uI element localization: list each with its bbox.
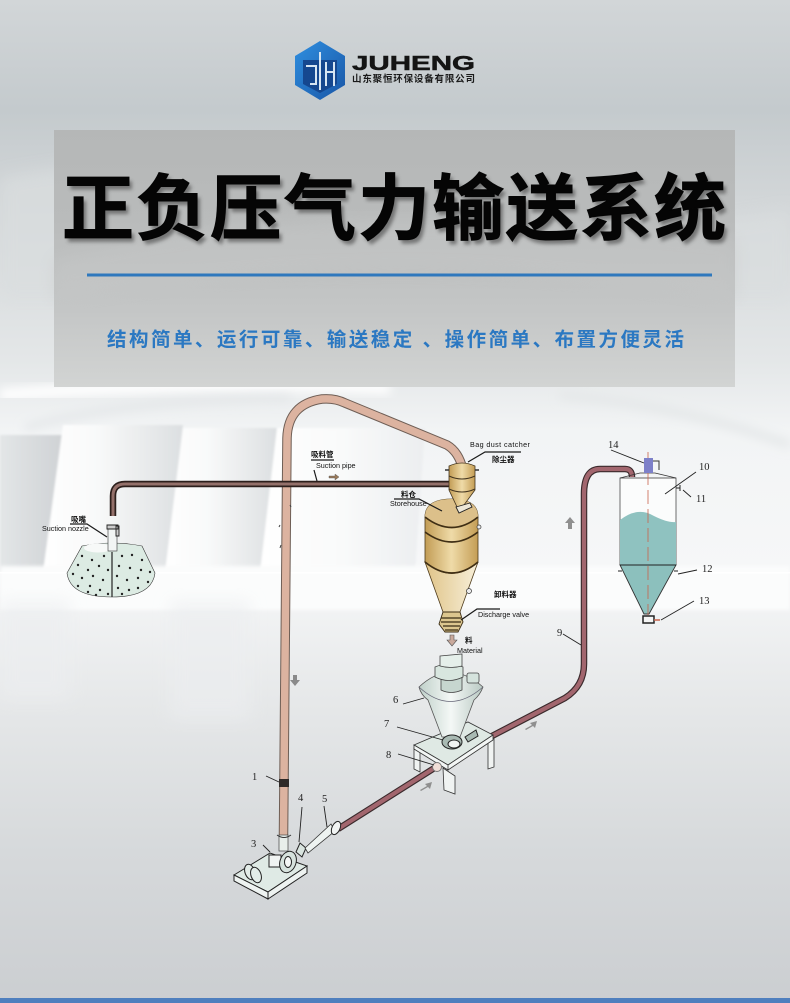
diagram: cyclone feeder with table	[414, 654, 494, 794]
icon: down arrow on pipe	[290, 675, 300, 686]
diagram: bag dust catcher	[445, 440, 531, 513]
title: 正负压气力输送系统	[62, 170, 726, 250]
number labels: 9	[557, 628, 562, 639]
bottom bar	[0, 998, 790, 1003]
number labels: 13	[699, 596, 710, 607]
diagram: storehouse	[390, 489, 481, 612]
table top	[414, 722, 493, 765]
label: discharge valve	[461, 589, 529, 620]
label: suction nozzle	[42, 514, 107, 537]
top inlet	[441, 675, 462, 692]
icon: flow arrows	[420, 517, 575, 791]
pipe sleeve	[432, 762, 442, 772]
number labels: 7	[384, 719, 389, 730]
rotary valve	[442, 735, 462, 749]
label: material with arrow: Material	[457, 646, 483, 655]
diagram: receiving silo	[618, 452, 680, 623]
diagram: long return pipe	[279, 399, 463, 835]
number labels: 4	[298, 793, 304, 804]
number labels: 3	[251, 839, 256, 850]
number labels: 14	[608, 440, 619, 451]
icon: hexagon logo mark	[295, 41, 345, 100]
diagram: suction pipe	[113, 484, 450, 516]
label: suction nozzle: Suction nozzle	[42, 524, 89, 533]
diagram: conveying pipe	[338, 469, 632, 829]
label: suction nozzle: 吸嘴	[71, 514, 86, 524]
label: suction pipe: Suction pipe	[316, 461, 356, 470]
label: bag dust catcher: Bag dust catcher	[470, 440, 531, 449]
cone	[419, 672, 483, 737]
label: discharge valve: Discharge valve	[478, 610, 529, 619]
label: suction pipe	[311, 449, 356, 481]
diagram: blower assembly	[234, 779, 343, 899]
label: storehouse: 料仓	[401, 489, 416, 499]
label: bag dust catcher	[468, 440, 531, 464]
logo	[295, 41, 475, 100]
title shadow: 正负压气力输送系统	[65, 174, 729, 254]
number labels: 1	[252, 772, 257, 783]
label: material with arrow: 料	[465, 635, 473, 645]
number labels: 10	[699, 462, 710, 473]
diagram: material pile with suction nozzle	[42, 514, 155, 597]
logo company name: 山东聚恒环保设备有限公司	[352, 73, 475, 85]
panel: title	[54, 130, 735, 387]
number labels	[251, 440, 712, 852]
label: suction pipe: 吸料管	[311, 449, 334, 459]
subtitle: 结构简单、运行可靠、输送稳定 、操作简单、布置方便灵活	[107, 328, 684, 351]
label: storehouse: Storehouse	[390, 499, 427, 508]
number labels: 5	[322, 794, 327, 805]
label: bag dust catcher: 除尘器	[492, 454, 515, 464]
label: material with arrow	[447, 635, 483, 655]
number labels: 8	[386, 750, 391, 761]
label: storehouse	[390, 489, 442, 511]
label: discharge valve: 卸料器	[494, 589, 517, 599]
number labels: 6	[393, 695, 398, 706]
number labels: 11	[696, 494, 706, 505]
logo name: JUHENG	[352, 53, 475, 75]
number labels: 12	[702, 564, 712, 575]
table legs	[414, 738, 494, 794]
diagram: discharge valve	[439, 589, 529, 632]
pipe clamp	[279, 779, 289, 787]
